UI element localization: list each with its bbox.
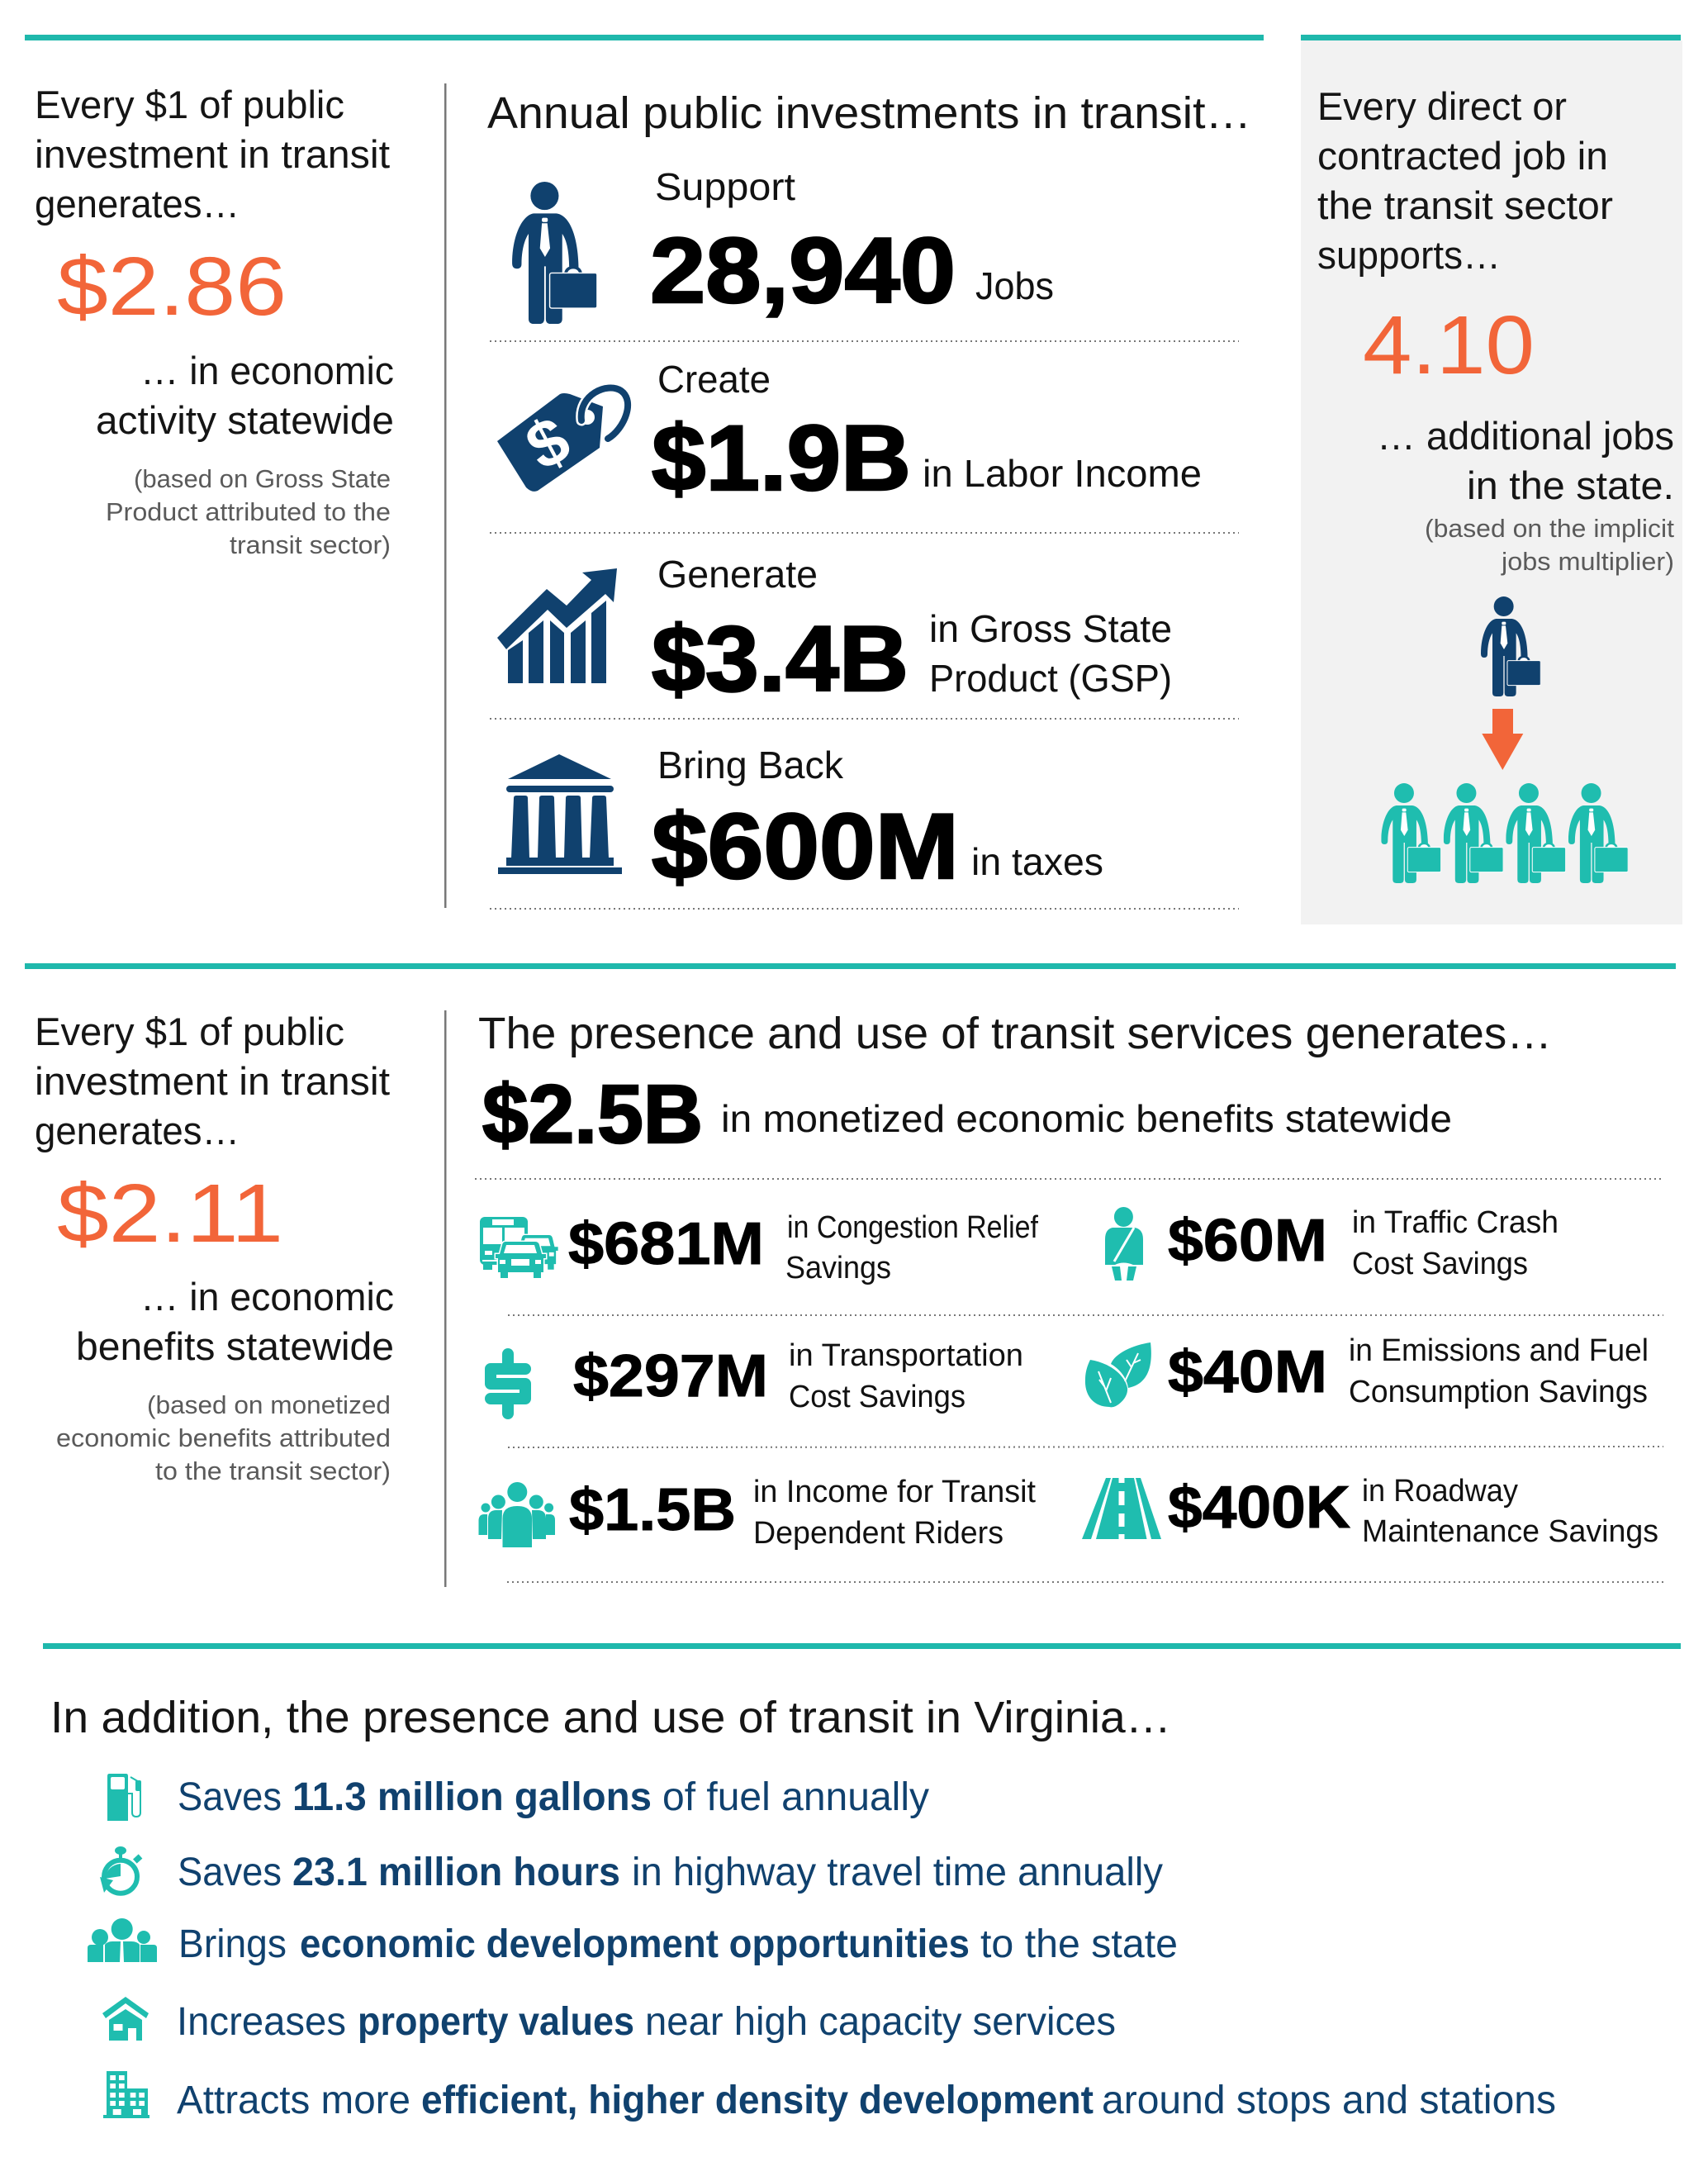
label: create: Create bbox=[657, 358, 771, 401]
value: $600M: $600M bbox=[652, 795, 959, 898]
section rule middle bbox=[25, 963, 1676, 969]
item: traffic crash bbox=[1105, 1205, 1559, 1281]
description: in Traffic Crash bbox=[1352, 1205, 1559, 1240]
description: Consumption Savings bbox=[1349, 1375, 1648, 1409]
text: Increases bbox=[177, 2000, 346, 2044]
intro text: generates… bbox=[35, 1109, 240, 1152]
panel: every $1 economic activity bbox=[35, 83, 394, 559]
icon: one worker bbox=[1481, 596, 1540, 696]
description bbox=[1349, 1333, 1649, 1409]
value: $60M bbox=[1168, 1208, 1327, 1274]
stat caption: … additional jobs bbox=[1377, 414, 1674, 458]
footnote bbox=[1425, 514, 1674, 576]
text: in highway travel time annually bbox=[632, 1851, 1163, 1894]
intro text bbox=[1317, 84, 1613, 277]
stat caption: … in economic bbox=[140, 1275, 394, 1319]
item: transportation cost bbox=[491, 1338, 1023, 1414]
section rule bottom bbox=[43, 1643, 1681, 1649]
panel: annual public investments bbox=[487, 88, 1251, 909]
heading: The presence and use of transit services generates… bbox=[478, 1009, 1552, 1058]
icon: government building bbox=[498, 754, 622, 874]
intro text bbox=[35, 1010, 390, 1152]
text bbox=[177, 2079, 1556, 2122]
row: jobs bbox=[512, 165, 1054, 324]
unit: gross state product: Product (GSP) bbox=[929, 657, 1172, 700]
text: 11.3 million gallons bbox=[292, 1775, 652, 1819]
text bbox=[177, 2000, 1116, 2044]
panel: every $1 economic benefits bbox=[35, 1010, 394, 1485]
headline stat: $2.5B: $2.5B bbox=[482, 1068, 703, 1161]
stat: $2.11: $2.11 bbox=[57, 1167, 283, 1260]
stat caption: in the state. bbox=[1467, 463, 1674, 507]
description bbox=[785, 1210, 1038, 1285]
description: in Emissions and Fuel bbox=[1349, 1333, 1649, 1368]
intro text: the transit sector bbox=[1317, 183, 1613, 227]
footnote: (based on the implicit bbox=[1425, 514, 1674, 543]
item: congestion relief bbox=[480, 1210, 1038, 1285]
list item: hours bbox=[100, 1846, 1163, 1894]
intro text: supports… bbox=[1317, 233, 1501, 277]
icon: buildings bbox=[103, 2071, 149, 2118]
description: Cost Savings bbox=[789, 1380, 965, 1414]
icon: stopwatch bbox=[100, 1846, 142, 1894]
value: 28,940: 28,940 bbox=[650, 219, 956, 322]
stat caption: benefits statewide bbox=[76, 1324, 394, 1368]
row: labor income bbox=[497, 358, 1202, 510]
footnote: (based on monetized bbox=[147, 1390, 391, 1419]
arrow: down bbox=[1482, 709, 1523, 770]
panel: additional benefits bbox=[50, 1693, 1556, 2122]
intro text: generates… bbox=[35, 182, 240, 226]
unit: gross state product: in Gross State bbox=[929, 607, 1172, 650]
text: of fuel annually bbox=[662, 1775, 929, 1819]
stat caption bbox=[1377, 414, 1674, 507]
stat caption: activity statewide bbox=[96, 398, 394, 442]
list item: economic development bbox=[88, 1918, 1178, 1966]
icon: price tag: $ bbox=[515, 402, 581, 484]
list item: fuel bbox=[107, 1774, 929, 1821]
text: Saves bbox=[178, 1851, 282, 1894]
stat: 4.10: 4.10 bbox=[1363, 299, 1535, 392]
value: $1.9B: $1.9B bbox=[652, 406, 911, 510]
heading: In addition, the presence and use of transit in Virginia… bbox=[50, 1693, 1171, 1742]
text: Saves bbox=[178, 1775, 282, 1819]
text: efficient, higher density development bbox=[421, 2079, 1094, 2122]
description: Dependent Riders bbox=[753, 1516, 1003, 1551]
icon: dollar sign bbox=[491, 1354, 525, 1414]
icon: leaves bbox=[1085, 1342, 1151, 1407]
icon: growth chart bbox=[497, 568, 617, 683]
footnote: economic benefits attributed bbox=[56, 1423, 391, 1452]
item: roadway maintenance bbox=[1082, 1474, 1658, 1549]
intro text: contracted job in bbox=[1317, 134, 1608, 178]
icon: bus and cars bbox=[480, 1217, 558, 1278]
unit: jobs: Jobs bbox=[975, 264, 1054, 307]
icon: fuel pump bbox=[107, 1774, 141, 1821]
footnote bbox=[56, 1390, 391, 1485]
value: $400K bbox=[1168, 1475, 1350, 1541]
row: taxes bbox=[498, 744, 1103, 898]
list item: property values bbox=[102, 1997, 1116, 2044]
label: bring back: Bring Back bbox=[657, 744, 844, 786]
footnote: to the transit sector) bbox=[155, 1456, 391, 1485]
intro text: investment in transit bbox=[35, 1059, 390, 1103]
icon: road bbox=[1082, 1478, 1161, 1539]
stat caption bbox=[76, 1275, 394, 1368]
vertical divider top bbox=[444, 83, 446, 908]
intro text: Every $1 of public bbox=[35, 1010, 344, 1053]
icon: business people bbox=[88, 1918, 157, 1962]
item: emissions and fuel bbox=[1085, 1333, 1649, 1409]
text bbox=[178, 1851, 1163, 1894]
unit: labor income: in Labor Income bbox=[923, 452, 1202, 495]
value: $3.4B: $3.4B bbox=[652, 607, 909, 710]
icon: price tag bbox=[497, 388, 628, 492]
description: in Roadway bbox=[1362, 1474, 1518, 1509]
text: property values bbox=[358, 2000, 634, 2044]
top rule left bbox=[25, 35, 1264, 40]
text: economic development opportunities bbox=[300, 1922, 970, 1966]
list item: density bbox=[103, 2071, 1556, 2122]
description: in Congestion Relief bbox=[787, 1210, 1038, 1245]
label: support: Support bbox=[655, 165, 795, 208]
row: gross state product bbox=[497, 553, 1172, 710]
text: to the state bbox=[980, 1922, 1178, 1966]
value: $297M bbox=[573, 1343, 768, 1409]
stat caption: … in economic bbox=[140, 349, 394, 392]
intro text: investment in transit bbox=[35, 132, 390, 176]
text: around stops and stations bbox=[1102, 2079, 1556, 2122]
vertical divider middle bbox=[444, 1010, 446, 1587]
item: income for riders bbox=[479, 1475, 1036, 1551]
value: $1.5B bbox=[569, 1477, 736, 1543]
stat caption bbox=[96, 349, 394, 442]
footnote: jobs multiplier) bbox=[1501, 547, 1674, 576]
panel background bbox=[1301, 40, 1682, 924]
description: Maintenance Savings bbox=[1362, 1514, 1658, 1549]
icon: seat belt bbox=[1105, 1207, 1143, 1281]
description: Cost Savings bbox=[1352, 1247, 1528, 1281]
panel: jobs multiplier bbox=[1301, 40, 1682, 924]
unit: gross state product bbox=[929, 607, 1172, 700]
icon: worker bbox=[512, 182, 597, 324]
intro text bbox=[35, 83, 390, 226]
text: Brings bbox=[178, 1922, 287, 1966]
footnote: (based on Gross State bbox=[134, 464, 391, 493]
footnote: transit sector) bbox=[230, 530, 391, 559]
stat: $2.86: $2.86 bbox=[57, 240, 287, 333]
text: 23.1 million hours bbox=[292, 1851, 620, 1894]
text bbox=[178, 1775, 929, 1819]
value: $40M bbox=[1168, 1339, 1327, 1405]
footnote: Product attributed to the bbox=[106, 497, 391, 526]
description bbox=[1362, 1474, 1658, 1549]
icon: house bbox=[102, 1997, 149, 2041]
icon: group of people bbox=[479, 1482, 555, 1547]
intro text: Every $1 of public bbox=[35, 83, 344, 126]
footnote bbox=[106, 464, 391, 559]
text: Attracts more bbox=[177, 2079, 410, 2122]
top rule right bbox=[1301, 35, 1681, 40]
headline caption: in monetized economic benefits statewide bbox=[721, 1097, 1452, 1140]
panel: monetized benefits bbox=[475, 1009, 1663, 1582]
unit: taxes: in taxes bbox=[971, 840, 1103, 883]
label: generate: Generate bbox=[657, 553, 818, 596]
intro text: Every direct or bbox=[1317, 84, 1567, 128]
heading: Annual public investments in transit… bbox=[487, 88, 1251, 138]
description bbox=[789, 1338, 1023, 1414]
description bbox=[753, 1475, 1036, 1551]
value: $681M bbox=[568, 1211, 764, 1277]
description: Savings bbox=[785, 1251, 891, 1285]
text: near high capacity services bbox=[645, 2000, 1116, 2044]
description: in Transportation bbox=[789, 1338, 1023, 1373]
description bbox=[1352, 1205, 1559, 1281]
description: in Income for Transit bbox=[753, 1475, 1036, 1509]
icons: four workers bbox=[1381, 783, 1628, 883]
